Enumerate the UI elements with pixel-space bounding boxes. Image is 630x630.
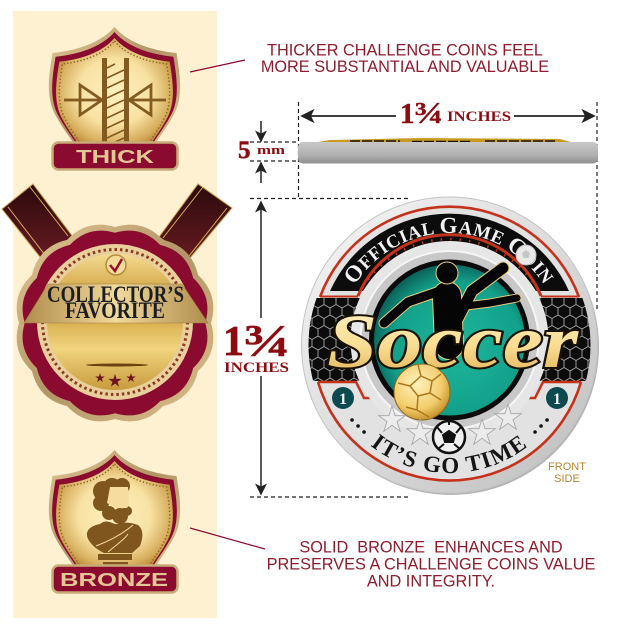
- badge: collector's favorite medal: [2, 184, 232, 421]
- ribbon label: [24, 282, 208, 323]
- cream background panel: [13, 11, 217, 618]
- callout: solid bronze: SOLID BRONZE ENHANCES AND: [299, 538, 563, 556]
- top band: [330, 214, 569, 291]
- gold ball: [394, 364, 450, 420]
- coin text: official game coin: OFFICIAL GAME COIN: [346, 218, 554, 284]
- dimension: width 1 3/4 inches: INCHES: [447, 109, 511, 125]
- player silhouette: [384, 262, 517, 345]
- banner: thick: THICK: [76, 147, 154, 167]
- coin side view: [298, 138, 598, 164]
- inner rings: [350, 241, 548, 439]
- badges: number one: 1: [339, 391, 347, 408]
- dimension: height 1 3/4 inches: ¾: [243, 315, 290, 366]
- honeycomb panels: [305, 298, 595, 381]
- ribbon label: FAVORITE: [65, 298, 165, 323]
- coin stars: [379, 404, 521, 444]
- callout: thicker coins: THICKER CHALLENGE COINS FEEL: [267, 42, 543, 60]
- coin text: it's go time: IT’S GO TIME: [370, 434, 527, 474]
- dimension: width 1 3/4 inches: [302, 95, 594, 130]
- icon: black soccer ball: [433, 421, 465, 453]
- badges: number one: 1: [553, 391, 561, 408]
- callout: solid bronze: AND INTEGRITY.: [367, 572, 495, 590]
- callout: solid bronze: PRESERVES A CHALLENGE COINS VALUE: [267, 556, 596, 574]
- banner: bronze: BRONZE: [60, 570, 168, 590]
- ribbons: [2, 184, 232, 258]
- icon: check: [106, 255, 126, 275]
- dimension: height 1 3/4 inches: 1: [223, 319, 244, 365]
- callout: thicker coins: [190, 42, 549, 76]
- callout: thicker coins: MORE SUBSTANTIAL AND VALUABLE: [261, 58, 549, 76]
- dimension: thickness 5mm: 5: [238, 137, 250, 164]
- banner: thick: [52, 142, 178, 170]
- coin front: [301, 196, 599, 495]
- icon: thickness diagram: [64, 58, 166, 143]
- dimension: height 1 3/4 inches: INCHES: [224, 360, 289, 376]
- icon: bust: [87, 478, 142, 566]
- label: front side: FRONT: [548, 461, 586, 473]
- soccer wordmark: Soccer: [327, 300, 580, 384]
- dimension: thickness 5mm: [238, 121, 285, 183]
- coin dots: [352, 420, 547, 432]
- banner: bronze: [52, 566, 178, 592]
- badge: thick: [49, 27, 180, 170]
- soccer wordmark: Soccer: [327, 300, 580, 384]
- dashed guide lines: [250, 102, 597, 497]
- dimension: thickness 5mm: mm: [257, 142, 285, 157]
- dimension: width 1 3/4 inches: 1: [400, 98, 414, 130]
- label: front side: SIDE: [554, 473, 580, 485]
- ribbon label: COLLECTOR’S: [47, 282, 184, 307]
- badge: bronze: [49, 450, 180, 592]
- dimension: height 1 3/4 inches: [223, 202, 290, 494]
- stars: [95, 373, 136, 387]
- callout: solid bronze: [190, 528, 596, 590]
- icon: silver ball: [516, 245, 536, 265]
- dimension: width 1 3/4 inches: ¾: [414, 95, 443, 130]
- badges: number one: [332, 387, 568, 409]
